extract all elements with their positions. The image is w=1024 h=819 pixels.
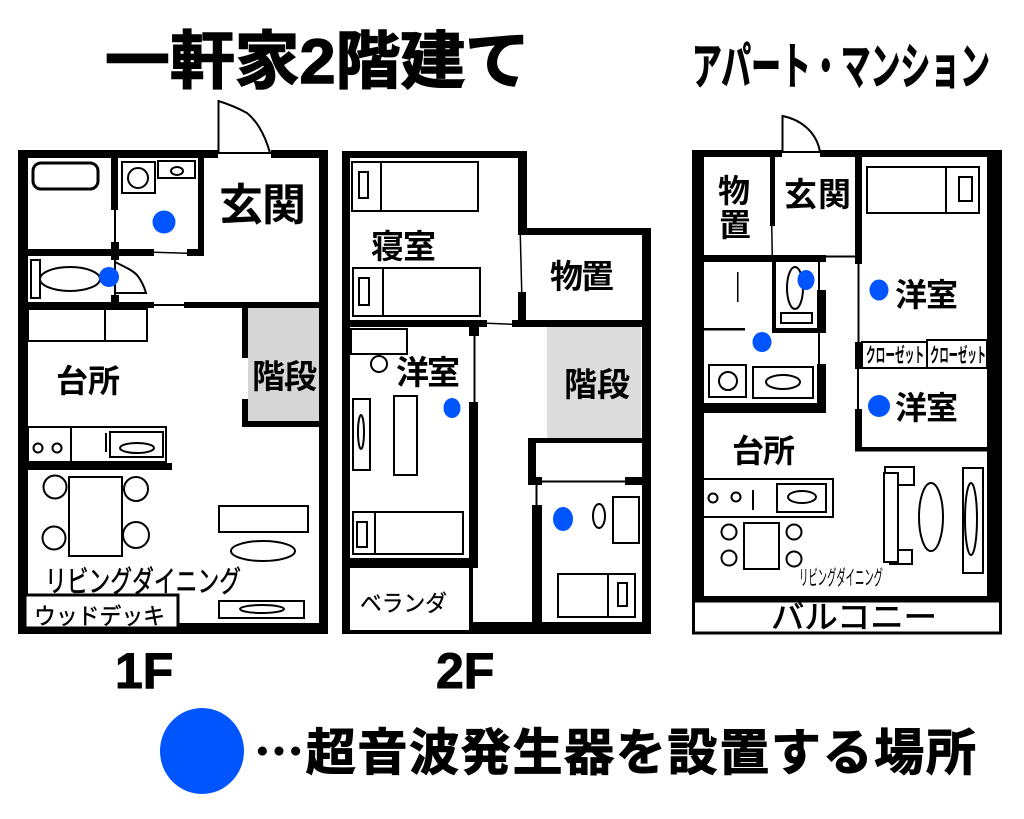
panel: 1F floor plan [18,101,328,699]
walls: 1F [18,150,328,634]
room labels: 1F: 台所 [56,363,120,399]
ultrasonic device marker: 2F lower right room [553,507,573,531]
balcony [694,599,1000,635]
bed 2: bedroom [353,268,480,316]
furniture: lower right room [593,497,639,543]
room labels: 2F: 洋室 [396,354,460,391]
room labels: apartment: 洋室 [895,390,958,426]
washing machine [122,162,155,193]
bed 1: bedroom [352,162,478,211]
room labels: 2F [360,228,630,616]
kitchen counter [28,427,166,462]
tv stand [219,601,304,618]
room labels: 2F: 物置 [550,258,614,295]
legend text: …超音波発生器を設置する場所 [254,713,976,785]
kitchen counter: apartment [703,479,833,517]
entrance door: apartment [782,116,820,152]
low table: apartment [919,483,943,551]
kitchen shelf [28,309,147,341]
room labels: 1F: 階段 [252,358,317,395]
sofa and low table [219,506,308,561]
ultrasonic device marker: 2F western room [444,398,460,418]
bed: apartment upper room [867,167,979,213]
bed: western room [353,512,463,554]
toilet [31,260,100,298]
room labels: 2F: ベランダ [360,590,447,616]
room labels: apartment: 置 [719,207,751,243]
floor label 1F: 1F [115,643,173,699]
walls: 2F [342,151,651,634]
wash basin: apartment [753,367,813,398]
washing machine: apartment [709,365,746,397]
toilet door [115,262,146,293]
room labels: apartment: 物 [718,173,750,209]
floor label 2F: 2F [436,643,494,699]
dining table and chairs [42,476,149,556]
dresser and table [353,396,417,475]
legend marker [160,708,244,794]
desk and chair [351,329,407,372]
stairs: 2F [547,327,641,438]
title: detached two-storey house: 一軒家2階建て [105,27,530,97]
balcony: バルコニー [771,599,937,635]
bed: lower right room [558,574,635,617]
ultrasonic device marker: apartment toilet [798,270,814,290]
room labels: apartment: リビングダイニング [799,567,883,590]
room labels: 2F: 階段 [564,366,630,403]
ultrasonic device marker: apartment upper room [870,280,888,300]
wood deck [25,595,178,629]
toilet: apartment [781,267,812,323]
room labels: apartment [718,173,958,590]
ultrasonic device marker: 1F toilet [99,267,119,287]
wash basin [158,161,195,178]
room labels: apartment: 玄関 [784,176,851,213]
sofa: apartment [884,467,914,564]
closets: クローゼット [866,343,924,367]
panel: 2F floor plan [342,151,651,699]
room labels: apartment: 洋室 [895,277,958,313]
entrance door: 1F [218,101,270,153]
room labels: 1F: リビングダイニング [45,566,241,599]
dining table and chairs: apartment [722,523,802,569]
room labels: 1F: 玄関 [219,181,306,230]
tv stand: apartment [963,468,983,573]
room labels: apartment: 台所 [732,433,795,469]
panel: apartment floor plan [692,116,1002,635]
bathtub [33,163,98,189]
wood deck: ウッドデッキ [34,603,165,629]
ultrasonic device marker: apartment lower room [868,395,890,417]
legend [160,708,976,794]
walls: apartment [692,150,1002,601]
room labels: 2F: 寝室 [371,228,436,265]
room labels: 1F [45,181,317,599]
ultrasonic device marker: apartment bath [752,332,772,352]
ultrasonic device marker: 1F washroom [152,210,176,234]
